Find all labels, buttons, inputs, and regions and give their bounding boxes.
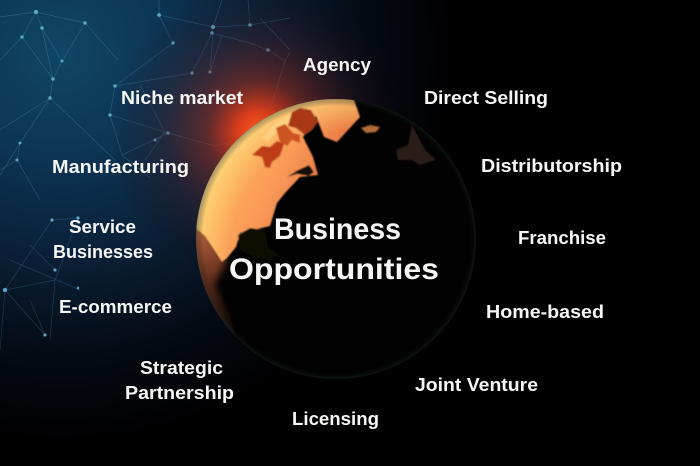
globe rim [196, 99, 476, 379]
label: Manufacturing: Manufacturing [52, 157, 189, 177]
dark continents on sunlit side [252, 141, 284, 168]
bright rim on sunlit side [196, 99, 360, 261]
label: Service Businesses: Service [69, 217, 136, 237]
label: Franchise: Franchise [518, 228, 606, 248]
label: Distributorship: Distributorship [481, 156, 622, 176]
globe [196, 99, 476, 379]
pale land patches, north [262, 115, 292, 142]
label: E-commerce: E-commerce [59, 297, 172, 317]
central title: Opportunities [229, 253, 439, 286]
label: Direct Selling: Direct Selling [424, 88, 548, 108]
label: Niche market: Niche market [121, 88, 243, 108]
label: Licensing: Licensing [292, 409, 379, 429]
sunlit hemisphere [196, 99, 361, 262]
label: Joint Venture: Joint Venture [415, 375, 538, 395]
central title: Business [274, 213, 401, 246]
label: Strategic Partnership [125, 358, 234, 403]
faint eastern continents [361, 125, 380, 133]
label: Strategic Partnership: Partnership [125, 383, 234, 403]
lower-left rim crescent [196, 223, 235, 332]
solar flare glow [90, 0, 420, 300]
label: Service Businesses: Businesses [53, 242, 153, 262]
label: Agency: Agency [303, 55, 371, 75]
label: Home-based: Home-based [486, 302, 604, 322]
central title [229, 213, 439, 286]
label: Strategic Partnership: Strategic [140, 358, 223, 378]
network lines and nodes [0, 0, 290, 350]
label: Service Businesses [53, 217, 153, 262]
